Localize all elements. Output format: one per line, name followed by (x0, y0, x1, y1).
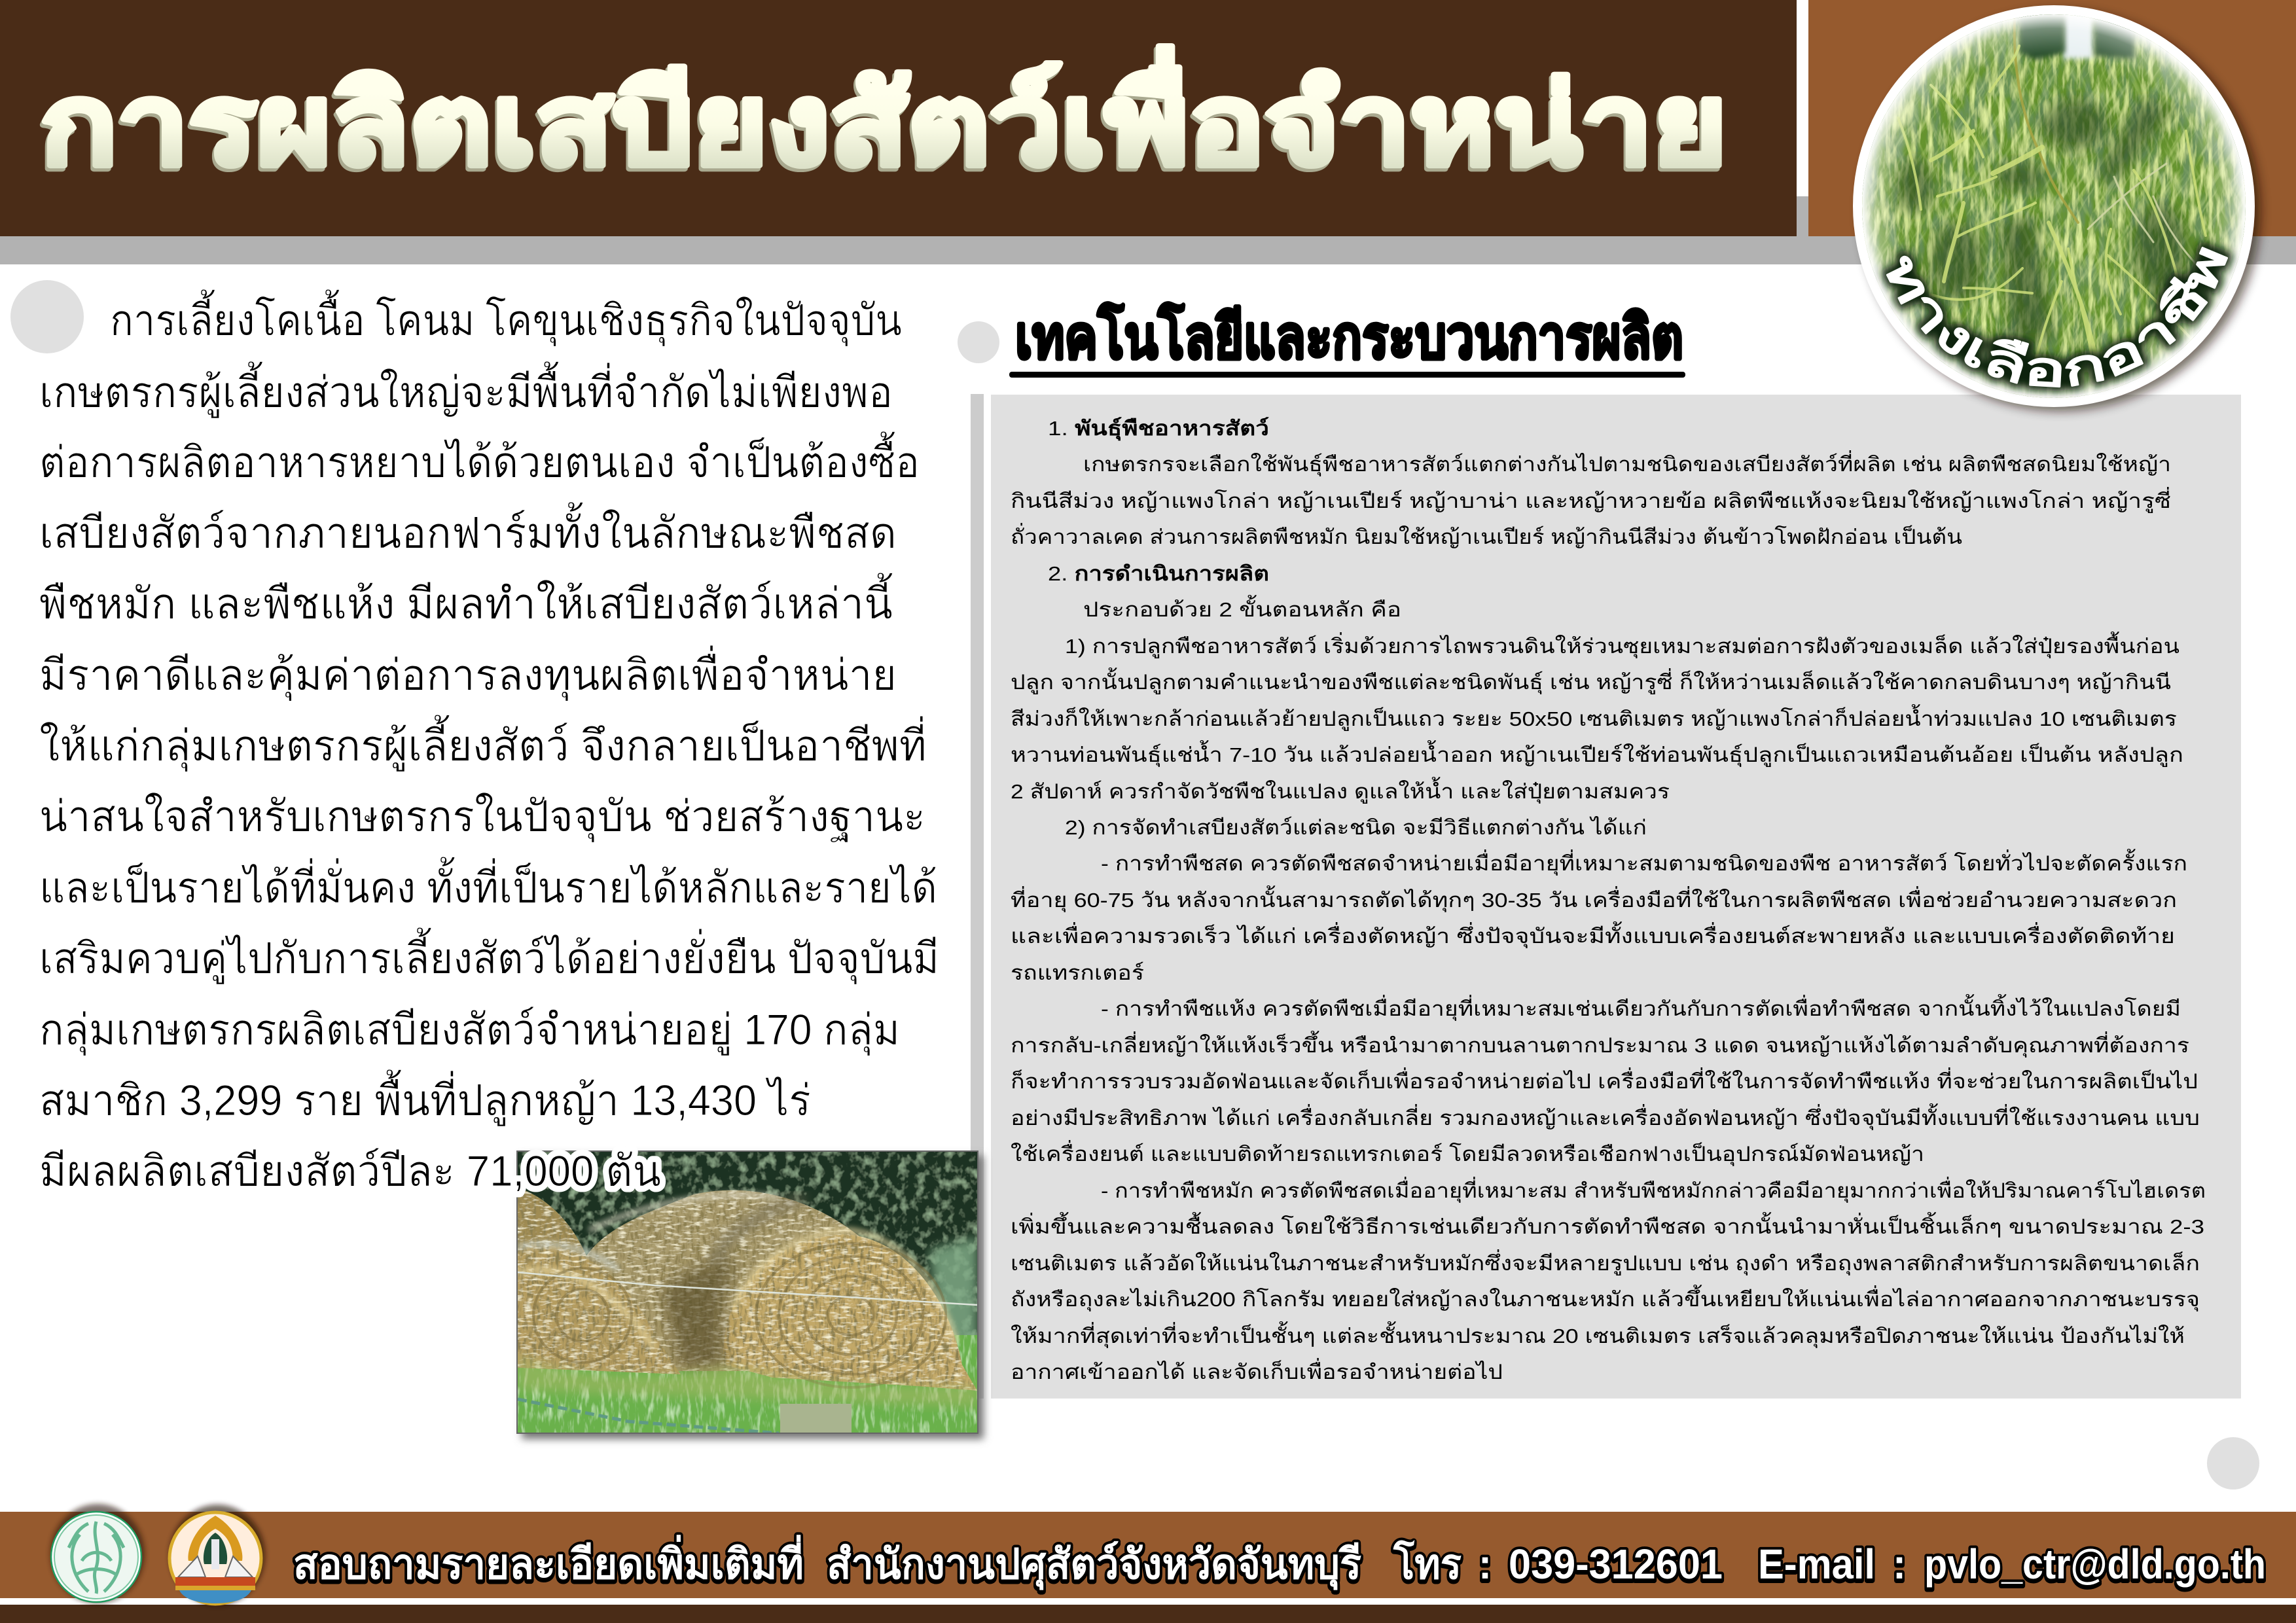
technology and production process text: ประกอบด้วย 2 ขั้นตอนหลัก คือ (1083, 595, 1401, 621)
left intro text block: ให้แก่กลุ่มเกษตรกรผู้เลี้ยงสัตว์ จึงกลายเป็นอาชีพที่ (39, 715, 927, 772)
header: dark brown title bar (0, 0, 1797, 236)
hay photo: bale rings (533, 1243, 946, 1387)
left intro text block: เสริมควบคู่ไปกับการเลี้ยงสัตว์ได้อย่างยั่งยืน ปัจจุบันมี (39, 927, 939, 985)
header band: grey rule under header (0, 196, 2296, 264)
left intro text block: การเลี้ยงโคเนื้อ โคนม โคขุนเชิงธุรกิจในปัจจุบัน (110, 289, 902, 347)
footer contact text: E-mail (1758, 1541, 1875, 1588)
left intro text block: มีราคาดีและคุ้มค่าต่อการลงทุนผลิตเพื่อจำหน่าย (39, 645, 897, 702)
technology and production process text: การกลับ-เกลี่ยหญ้าให้แห้งเร็วขึ้น หรือนำมาตากบนลานตากประมาณ 3 แดด จนหญ้าแห้งได้ตามลำดับคุณภาพที่ต้องการ (1011, 1031, 2189, 1058)
footer contact text: สำนักงานปศุสัตว์จังหวัดจันทบุรี (827, 1541, 1361, 1590)
left intro text block (39, 289, 939, 1127)
technology and production process text: ถั่วคาวาลเคด ส่วนการผลิตพืชหมัก นิยมใช้หญ้าเนเปียร์ หญ้ากินนีสีม่วง ต้นข้าวโพดฝักอ่อน เป็นต้น (1011, 523, 1962, 548)
technology and production process text: 2 สัปดาห์ ควรกำจัดวัชพืชในแปลง ดูแลให้น้ำ และใส่ปุ๋ยตามสมควร (1011, 777, 1670, 804)
grass photo: crossing light streaks right (1708, 0, 2296, 553)
hay photo: lower wire (518, 1399, 779, 1433)
heading underline (1009, 372, 1685, 378)
left intro text block: น่าสนใจสำหรับเกษตรกรในปัจจุบัน ช่วยสร้างฐานะ (39, 792, 925, 843)
technology and production process text: เซนติเมตร แล้วอัดให้แน่นในภาชนะสำหรับหมักซึ่งจะมีหลายรูปแบบ เช่น ถุงดำ หรือถุงพลาสติกสำหรับการผลิตขนาดเล็ก (1011, 1249, 2200, 1276)
left intro last line with halo over photo: มีผลผลิตเสบียงสัตว์ปีละ 71,000 ตัน (39, 1147, 661, 1195)
grass photo: light blades (1898, 20, 2215, 366)
grass photo: crossing light streaks left (1677, 0, 2296, 580)
photo: hay bales (516, 1150, 984, 1439)
technology and production process text: - การทำพืชแห้ง ควรตัดพืชเมื่อมีอายุที่เหมาะสมเช่นเดียวกันกับการตัดเพื่อทำพืชสด จากนั้นทิ้งไว้ในแปลงโดยมี (1101, 994, 2181, 1022)
photo badge: grass circle (1853, 4, 2267, 419)
footer contact text (293, 1535, 2266, 1590)
left intro text block: ต่อการผลิตอาหารหยาบได้ด้วยตนเอง จำเป็นต้องซื้อ (39, 431, 920, 486)
left intro text block: กลุ่มเกษตรกรผลิตเสบียงสัตว์จำหน่ายอยู่ 170 กลุ่ม (39, 1005, 900, 1056)
title: การผลิตเสบียงสัตว์เพื่อจำหน่าย (41, 46, 1727, 188)
technology and production process text: รถแทรกเตอร์ (1011, 961, 1144, 984)
footer contact text: สอบถามรายละเอียดเพิ่มเติมที่ (293, 1535, 804, 1588)
hay photo: bale highlights (518, 1195, 956, 1348)
logo: Department of Livestock seal (50, 1504, 145, 1603)
hay photo: grey wrap band on back bale (713, 1198, 805, 1263)
hay photo: green grass (518, 1335, 977, 1433)
hay photo: pale green right gap (929, 1237, 977, 1348)
technology and production process text: - การทำพืชหมัก ควรตัดพืชสดเมื่ออายุที่เหมาะสม สำหรับพืชหมักกล่าวคือมีอายุมากกว่าเพื่อให้ปริมาณคาร์โบไฮเดรต (1101, 1177, 2206, 1204)
hay photo: fence wire (518, 1272, 977, 1305)
technology and production process text: ถังหรือถุงละไม่เกิน200 กิโลกรัม ทยอยใส่หญ้าลงในภาชนะหมัก แล้วขึ้นเหยียบให้แน่นเพื่อไล่อากาศออกจากภาชนะบรรจุ (1011, 1285, 2200, 1312)
technology and production process text: เกษตรกรจะเลือกใช้พันธุ์พืชอาหารสัตว์แตกต่างกันไปตามชนิดของเสบียงสัตว์ที่ผลิต เช่น ผลิตพืชสดนิยมใช้หญ้า (1083, 450, 2171, 477)
badge caption: career choice: ทางเลือกอาชีพ (1876, 236, 2238, 398)
hay photo: dark trees background (518, 1152, 977, 1348)
technology and production process text: ให้มากที่สุดเท่าที่จะทำเป็นชั้นๆ แต่ละชั้นหนาประมาณ 20 เซนติเมตร เสร็จแล้วคลุมหรือปิดภาชนะให้แน่น ป้องกันไม่ให้ (1011, 1321, 2185, 1349)
technology and production process text (1011, 417, 2206, 1383)
badge caption: career choice: ทางเลือกอาชีพ (1886, 247, 2228, 387)
technology and production process text: ปลูก จากนั้นปลูกตามคำแนะนำของพืชแต่ละชนิดพันธุ์ เช่น หญ้ารูซี่ ก็ให้หว่านเมล็ดแล้วใช้คาดกลบดินบางๆ หญ้ากินนี (1011, 668, 2171, 695)
footer contact text: : (1479, 1541, 1492, 1588)
technology and production process text: อากาศเข้าออกได้ และจัดเก็บเพื่อรอจำหน่ายต่อไป (1011, 1358, 1503, 1383)
technology and production process text: ก็จะทำการรวบรวมอัดฟ่อนและจัดเก็บเพื่อรอจำหน่ายต่อไป เครื่องมือที่ใช้ในการจัดทำพืชแห้ง ที่จะช่วยในการผลิตเป็นไป (1011, 1067, 2198, 1093)
decorative grey dot: bottom right (2207, 1437, 2259, 1489)
technology and production process text: 2) การจัดทำเสบียงสัตว์แต่ละชนิด จะมีวิธีแตกต่างกัน ได้แก่ (1065, 816, 1647, 839)
hay photo: fence post (780, 1404, 852, 1434)
section heading: เทคโนโลยีและกระบวนการผลิต (1015, 302, 1683, 371)
footer contact text: 039-312601 (1509, 1541, 1723, 1588)
technology and production process text: 1) การปลูกพืชอาหารสัตว์ เริ่มด้วยการไถพรวนดินให้ร่วนซุยเหมาะสมต่อการฝังตัวของเมล็ด แล้วใส่ปุ๋ยรองพื้นก่อน (1065, 632, 2179, 659)
header: orange-brown corner panel (1808, 0, 2296, 236)
technology and production process text: ใช้เครื่องยนต์ และแบบติดท้ายรถแทรกเตอร์ โดยมีลวดหรือเชือกฟางเป็นอุปกรณ์มัดฟ่อนหญ้า (1011, 1140, 1924, 1167)
footer contact text: โทร (1393, 1539, 1462, 1588)
technology and production process text: และเพื่อความรวดเร็ว ได้แก่ เครื่องตัดหญ้า ซึ่งปัจจุบันจะมีทั้งแบบเครื่องยนต์สะพายหลัง และแบบเครื่องตัดติดท้าย (1011, 921, 2175, 949)
technology and production process text: สีม่วงก็ให้เพาะกล้าก่อนแล้วย้ายปลูกเป็นแถว ระยะ 50x50 เซนติเมตร หญ้าแพงโกล่าก็ปล่อยน้ำท่วมแปลง 10 เซนติเมตร (1011, 704, 2177, 731)
panel: production technology body background (991, 395, 2241, 1399)
decorative grey dot: heading (958, 321, 999, 363)
footer contact text: : (1893, 1541, 1906, 1588)
grass photo: tree line and sky (2019, 13, 2135, 60)
technology and production process text: เพิ่มขึ้นและความชื้นลดลง โดยใช้วิธีการเช่นเดียวกับการตัดทำพืชสด จากนั้นนำมาหั่นเป็นชิ้นเล็กๆ ขนาดประมาณ 2-3 (1011, 1212, 2204, 1238)
technology and production process text: - การทำพืชสด ควรตัดพืชสดจำหน่ายเมื่อมีอายุที่เหมาะสมตามชนิดของพืช อาหารสัตว์ โดยทั่วไปจะตัดครั้งแรก (1101, 849, 2187, 876)
hay photo: shadow between bales (661, 1259, 740, 1368)
grass photo: base (1862, 14, 2246, 398)
left intro last line with halo over photo: มีผลผลิตเสบียงสัตว์ปีละ 71,000 ตัน (39, 1147, 661, 1195)
footer contact text: pvlo_ctr@dld.go.th (1924, 1541, 2266, 1588)
section 1 heading: 1. พันธุ์พืชอาหารสัตว์ (1048, 417, 1269, 441)
section 2 heading: 2. การดำเนินการผลิต (1048, 562, 1269, 585)
hay photo: bales (518, 1188, 977, 1391)
panel: grey side strip (971, 394, 984, 1399)
logo: Chanthaburi province seal (170, 1505, 265, 1605)
technology and production process text: ที่อายุ 60-75 วัน หลังจากนั้นสามารถตัดได้ทุกๆ 30-35 วัน เครื่องมือที่ใช้ในการผลิตพืชสด เพื่อช่วยอำนวยความสะดวก (1011, 885, 2177, 913)
left intro text block: เสบียงสัตว์จากภายนอกฟาร์มทั้งในลักษณะพืชสด (39, 502, 897, 557)
footer: contact bar (0, 1512, 2296, 1598)
left intro text block: และเป็นรายได้ที่มั่นคง ทั้งที่เป็นรายได้หลักและรายได้ (39, 857, 937, 912)
grass photo: white vignette edge (1862, 14, 2246, 398)
hay photo: dry grass fringe (518, 1355, 977, 1407)
technology and production process text: อย่างมีประสิทธิภาพ ได้แก่ เครื่องกลับเกลี่ย รวมกองหญ้าและเครื่องอัดฟ่อนหญ้า ซึ่งปัจจุบันมีทั้งแบบที่ใช้แรงงานคน แบบ (1011, 1103, 2200, 1131)
left intro text block: พืชหมัก และพืชแห้ง มีผลทำให้เสบียงสัตว์เหล่านี้ (39, 573, 893, 628)
footer: dark bottom strip (0, 1605, 2296, 1623)
left intro text block: เกษตรกรผู้เลี้ยงส่วนใหญ่จะมีพื้นที่จำกัดไม่เพียงพอ (39, 361, 893, 419)
left intro text block: สมาชิก 3,299 ราย พื้นที่ปลูกหญ้า 13,430 ไร่ (39, 1069, 811, 1127)
technology and production process text: กินนีสีม่วง หญ้าแพงโกล่า หญ้าเนเปียร์ หญ้าบาน่า และหญ้าหวายข้อ ผลิตพืชแห้งจะนิยมใช้หญ้าแพงโกล่า หญ้ารูซี่ (1011, 487, 2171, 513)
technology and production process text: หวานท่อนพันธุ์แช่น้ำ 7-10 วัน แล้วปล่อยน้ำออก หญ้าเนเปียร์ใช้ท่อนพันธุ์ปลูกเป็นแถวเหมือนต้นอ้อย เป็นต้น หลังปลูก (1011, 740, 2183, 768)
decorative grey dot: left column (10, 280, 84, 353)
grass photo: dark clumps (1897, 98, 2186, 340)
